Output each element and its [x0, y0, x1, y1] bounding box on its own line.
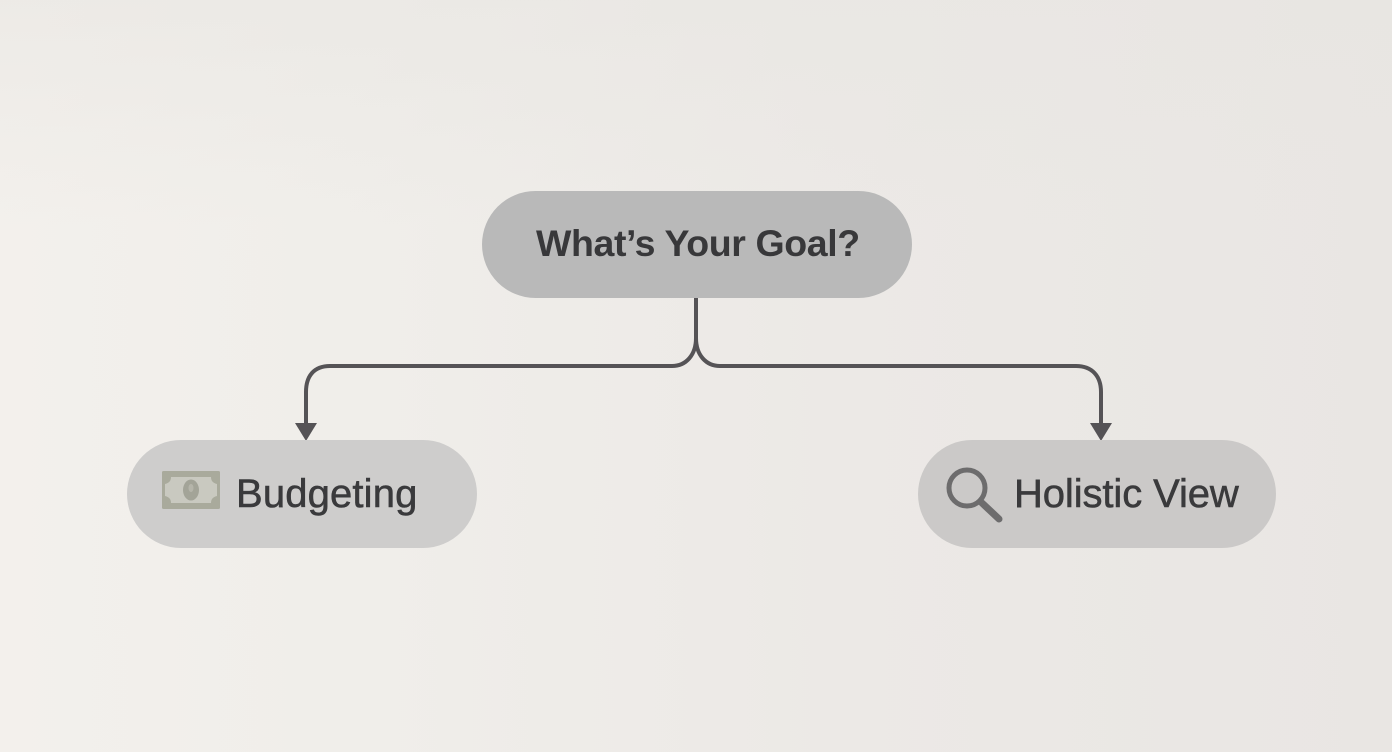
label: Budgeting: Budgeting	[236, 472, 418, 516]
icon: banknote	[162, 471, 220, 509]
top node: What's Your Goal?	[482, 191, 912, 298]
right node: Holistic View	[918, 440, 1276, 548]
left node: Budgeting	[127, 440, 477, 548]
icon: magnifying glass	[946, 468, 1002, 522]
heading text: What’s Your Goal?	[536, 222, 860, 264]
label: Holistic View: Holistic View	[1014, 472, 1239, 516]
